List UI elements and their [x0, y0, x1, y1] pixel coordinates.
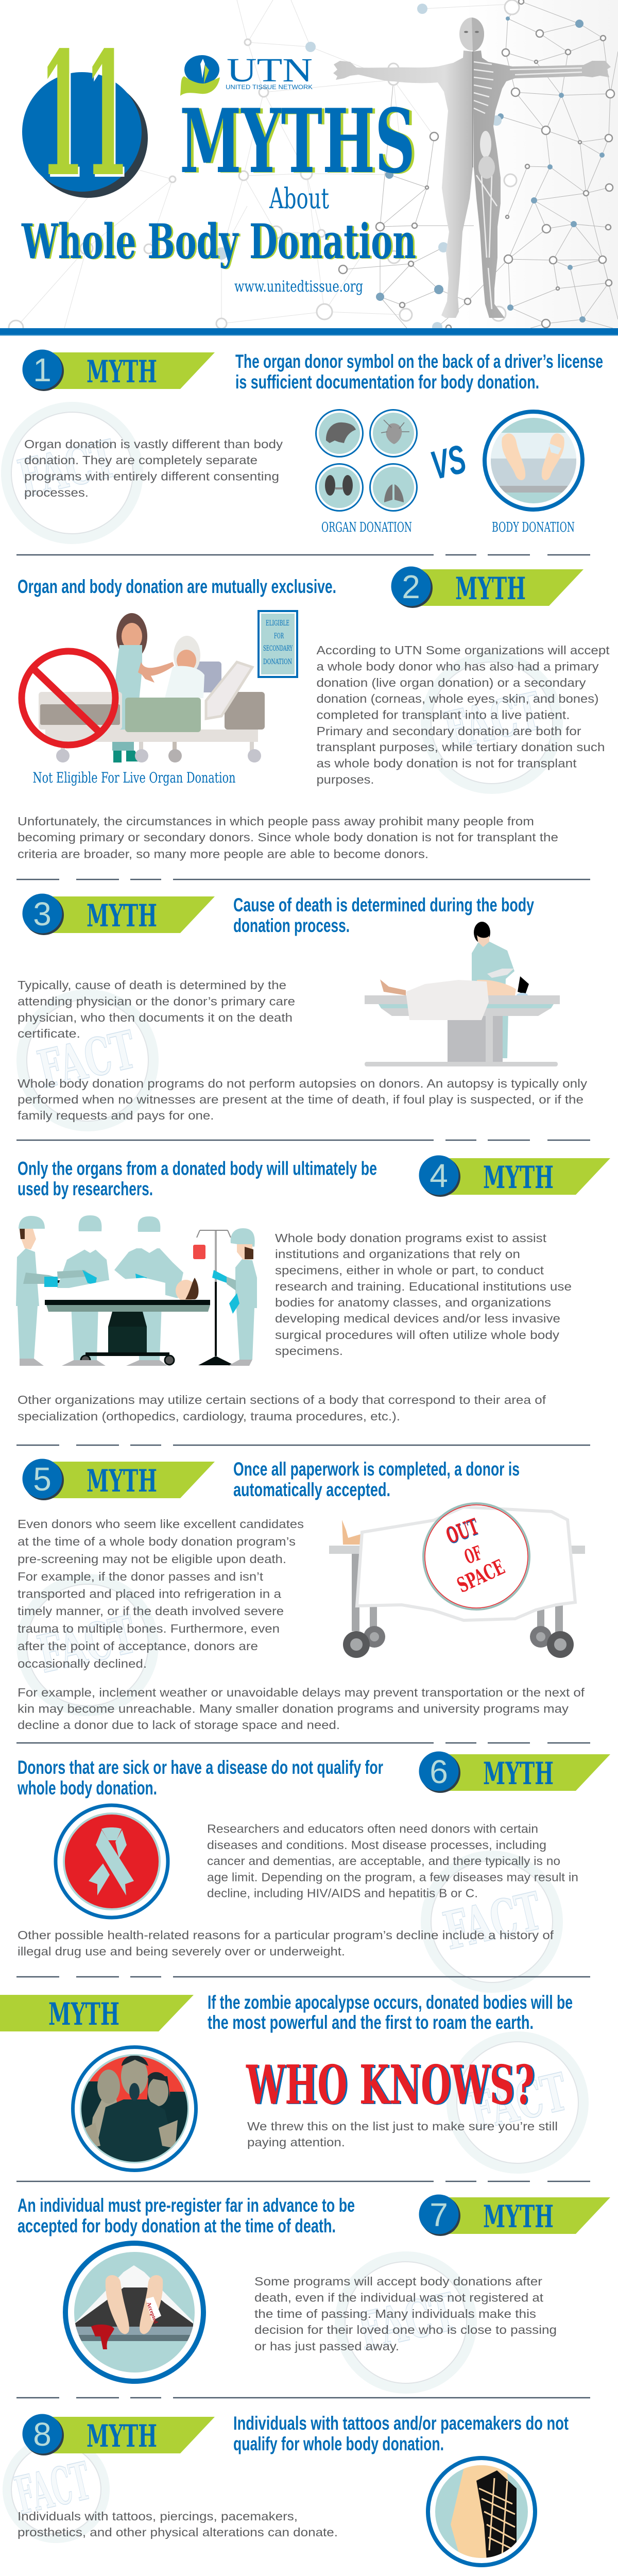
banner: myth 7: MYTH — [483, 2199, 554, 2235]
text: myth 5 fact: transported and placed into refrigeration in a — [18, 1587, 282, 1600]
icon: liver — [316, 410, 363, 456]
heading: myth 6: whole body donation. — [17, 1777, 157, 1799]
text: myth 5 fact: trauma to multiple bones. Furthermore, even — [18, 1622, 280, 1635]
text: myth 4 fact: specimens, either in whole or part, to conduct — [275, 1263, 544, 1277]
heading: zombie myth — [208, 1992, 573, 2033]
text: myth 2 fact: transplant purposes, while tertiary donation such — [316, 740, 605, 754]
caption: not eligible: Not Eligible For Live Organ Donation — [33, 769, 236, 786]
heading: myth 4 — [18, 1158, 377, 1199]
heading: myth 2: Organ and body donation are mutually exclusive. — [18, 576, 336, 597]
banner: myth 2: 2 — [402, 568, 420, 605]
text: myth 5 continued: kin may become unreachable. Many smaller donation programs and university programs may — [18, 1702, 569, 1716]
FACT stamp 6: FACT — [438, 1880, 547, 1961]
banner: myth 5: MYTH — [87, 1463, 157, 1499]
FACT stamp 6 — [426, 1856, 558, 1988]
text: myth 2 fact: as whole body donation is not for transplant — [316, 756, 577, 770]
text: myth 2 fact: a whole body donor who has also had a primary — [316, 659, 599, 673]
illustration: surgical team — [16, 1215, 257, 1366]
FACT stamp 1: FACT — [13, 428, 122, 509]
text: myth 2 fact: According to UTN Some organizations will accept — [316, 643, 610, 657]
website address: www.unitedtissue.org — [234, 278, 363, 296]
text: myth 1 fact: processes. — [24, 486, 89, 499]
banner: myth 1 — [23, 349, 215, 391]
FACT stamp 7: FACT — [353, 2281, 462, 2362]
banner: myth 7: 7 — [430, 2196, 448, 2233]
banner: myth 2: MYTH — [455, 571, 526, 607]
text: myth 6 continued: illegal drug use and being severely over or underweight. — [18, 1944, 345, 1958]
stamp: out of space — [423, 1503, 529, 1609]
text: 11 — [41, 17, 131, 217]
text: myth 5 fact: pre-screening may not be eligible upon death. — [18, 1552, 286, 1566]
banner: myth 6 — [419, 1752, 610, 1793]
text: myth 7 fact — [254, 2275, 557, 2353]
VS label: VS — [426, 436, 470, 488]
banner: zombie myth: MYTH — [48, 1996, 119, 2032]
FACT stamp zombie — [452, 2037, 583, 2168]
logo: United Tissue Network — [180, 52, 313, 96]
banner: myth 1: 1 — [33, 351, 52, 388]
title: MYTHS: MYTHS — [182, 90, 418, 194]
FACT stamp 5: FACT — [32, 1604, 142, 1685]
banner: myth 6: MYTH — [483, 1756, 554, 1792]
title: MYTHS: MYTHS — [180, 90, 415, 193]
title: MYTHS — [180, 90, 418, 194]
text: myth 6 fact — [207, 1822, 578, 1900]
heading: myth 6 — [17, 1757, 383, 1799]
text: myth 2 fact: purposes. — [316, 773, 374, 786]
heading: myth 7: An individual must pre-register far in advance to be — [18, 2195, 355, 2216]
icon: heart — [370, 410, 417, 456]
text: myth 2 continued: criteria are broader, so many more people are able to become donors. — [18, 847, 428, 860]
text: myth 3 fact: Typically, cause of death is determined by the — [18, 978, 286, 992]
title: Whole Body Donation — [21, 213, 418, 270]
text: myth 4 fact — [275, 1231, 572, 1358]
FACT stamp 5 — [22, 1579, 153, 1711]
banner: myth 2 — [391, 567, 583, 608]
text: myth 2 fact: Primary and secondary donation are both for — [316, 724, 581, 738]
text: myth 1 fact: donation. They are completely separate — [24, 453, 258, 467]
banner: myth 6: 6 — [430, 1753, 448, 1790]
heading: myth 8: qualify for whole body donation. — [233, 2433, 444, 2454]
stamp: out of space: OUT — [443, 1514, 482, 1548]
text: zombie fact: paying attention. — [247, 2136, 345, 2149]
text: myth 1 fact: programs with entirely different consenting — [24, 470, 279, 483]
FACT stamp 8 — [7, 2441, 105, 2538]
text: myth 2 continued: becoming primary or secondary donors. Since whole body donation is not for transplant the — [18, 831, 558, 844]
FACT stamp 8: FACT — [10, 2450, 96, 2526]
banner: myth 5: 5 — [33, 1461, 52, 1498]
icon: no symbol over bed — [22, 651, 115, 745]
text: myth 4 fact: developing medical devices and/or less invasive — [275, 1312, 560, 1325]
icon: feet with toe tag: Accepted — [145, 2301, 159, 2325]
heading: myth 4: Only the organs from a donated body will ultimately be — [18, 1158, 377, 1179]
big number 11 badge — [22, 14, 148, 217]
sign: eligible for secondary donation — [259, 611, 297, 677]
text: myth 4 continued: specialization (orthopedics, cardiology, trauma procedures, etc.). — [18, 1410, 400, 1423]
illustration: nurse with patient in bed — [39, 613, 265, 762]
text: myth 6 fact: Researchers and educators often need donors with certain — [207, 1822, 538, 1835]
text: myth 5 fact: For example, if the donor passes and isn’t — [18, 1570, 264, 1583]
banner: myth 8: 8 — [33, 2416, 52, 2453]
text: myth 7 fact: death, even if the individual was not registered at — [254, 2291, 544, 2304]
sign: eligible for secondary donation: FOR — [274, 632, 284, 640]
text: myth 5 fact: Even donors who seem like excellent candidates — [18, 1517, 304, 1531]
banner: myth 3 — [23, 893, 215, 935]
heading: myth 6: Donors that are sick or have a disease do not qualify for — [18, 1757, 383, 1778]
heading: myth 5 — [233, 1459, 520, 1500]
text: myth 3 continued: family requests and pays for one. — [18, 1109, 214, 1122]
heading: myth 5: automatically accepted. — [233, 1479, 390, 1500]
banner: myth 4: MYTH — [483, 1160, 554, 1196]
heading: myth 1 — [235, 351, 603, 393]
heading: myth 8 — [233, 2413, 569, 2454]
text: myth 6 continued: Other possible health-related reasons for a particular program’s decline include a history of — [18, 1928, 554, 1942]
text: myth 7 fact: Some programs will accept body donations after — [254, 2275, 542, 2288]
text: myth 3 fact — [18, 978, 295, 1040]
text: myth 4 fact: bodies for anatomy classes, and organizations — [275, 1296, 551, 1309]
text: myth 5 fact: occasionally declined. — [18, 1657, 147, 1670]
FACT stamp 2 — [426, 657, 558, 789]
heading: myth 3 — [233, 894, 534, 936]
title: Whole Body Donation: Whole Body Donation — [23, 214, 418, 270]
icon: awareness ribbon — [56, 1805, 168, 1918]
logo: United Tissue Network: UNITED TISSUE NETWORK — [226, 84, 313, 91]
banner: zombie myth — [0, 1995, 194, 2032]
text: myth 7 fact: decision for their loved one who is close to passing — [254, 2323, 557, 2336]
text: myth 2 continued: Unfortunately, the circumstances in which people pass away prohibit many people from — [18, 815, 534, 828]
sign: eligible for secondary donation: ELIGIBLE — [266, 619, 289, 628]
text: myth 1 fact — [24, 437, 283, 499]
sign: eligible for secondary donation: SECONDARY — [263, 645, 293, 653]
text: zombie fact: We threw this on the list just to make sure you’re still — [247, 2120, 558, 2133]
heading: myth 7: accepted for body donation at the time of death. — [18, 2215, 336, 2236]
text: myth 5 fact: at the time of a whole body donation program’s — [18, 1535, 296, 1548]
text: myth 1 fact: Organ donation is vastly different than body — [24, 437, 283, 451]
FACT stamp 2: FACT — [438, 681, 547, 761]
text: myth 8 fact: Individuals with tattoos, piercings, pacemakers, — [18, 2510, 298, 2523]
text: myth 5 continued: decline a donor due to lack of storage space and need. — [18, 1718, 340, 1732]
illustration: gurney under sheet — [329, 1507, 585, 1658]
icon: lungs — [370, 464, 417, 511]
banner: myth 8: MYTH — [87, 2418, 157, 2454]
icon: kidneys — [316, 464, 363, 511]
banner: myth 1: MYTH — [87, 354, 157, 390]
title: About: About — [269, 182, 329, 215]
text: myth 6 continued — [18, 1928, 554, 1958]
heading: myth 4: used by researchers. — [18, 1178, 153, 1199]
dividers — [16, 555, 590, 2576]
FACT stamp 7 — [340, 2257, 472, 2388]
text: myth 6 fact: cancer and dementias, are acceptable, and there typically is no — [207, 1854, 560, 1868]
banner: myth 5 — [23, 1459, 215, 1500]
banner: myth 3: 3 — [33, 895, 52, 933]
FACT stamp 1 — [6, 407, 138, 539]
text: myth 4 fact: institutions and organizations that rely on — [275, 1247, 520, 1261]
text: zombie fact — [247, 2120, 558, 2149]
logo: United Tissue Network: UTN — [227, 52, 313, 89]
text: myth 4 continued — [18, 1393, 546, 1423]
header background network — [9, 0, 618, 335]
heading: myth 3: donation process. — [233, 915, 350, 936]
text: myth 7 fact: or has just passed away. — [254, 2340, 399, 2353]
text: myth 5 fact: after the point of acceptance, donors are — [18, 1639, 258, 1653]
sign: eligible for secondary donation: DONATION — [263, 658, 292, 666]
banner: myth 8 — [23, 2414, 215, 2455]
title: Whole Body Donation: Whole Body Donation — [21, 213, 416, 269]
heading: myth 7 — [18, 2195, 355, 2236]
text: myth 8 fact: prosthetics, and other physical alterations can donate. — [18, 2526, 338, 2539]
banner: myth 4 — [419, 1155, 610, 1197]
label: organ donation: ORGAN DONATION — [321, 520, 412, 535]
illustration: doctor examining body on table — [365, 922, 560, 1066]
text: myth 8 fact — [18, 2510, 338, 2539]
text: myth 4 fact: Whole body donation programs exist to assist — [275, 1231, 547, 1245]
text: myth 4 fact: specimens. — [275, 1344, 343, 1358]
banner: myth 7 — [419, 2195, 610, 2236]
icon: zombies — [73, 2047, 196, 2170]
text: myth 4 fact: surgical procedures will often utilize whole body — [275, 1328, 559, 1342]
banner: myth 3: MYTH — [87, 898, 157, 934]
text: myth 5 fact: timely manner, or if the death involved severe — [18, 1604, 284, 1618]
text: myth 5 continued — [18, 1686, 585, 1732]
text: myth 3 continued: performed when no witnesses are present at the time of death, if foul play is suspected, or if the — [18, 1093, 583, 1106]
text: myth 7 fact: the time of passing. Many individuals make this — [254, 2307, 536, 2320]
icon: body donation feet — [485, 412, 582, 510]
text: myth 2 fact: donation (live organ donation) or a secondary — [316, 676, 586, 689]
illustration: human anatomy figure — [333, 18, 611, 318]
text: myth 3 continued: Whole body donation programs do not perform autopsies on donors. An autopsy is typically only — [18, 1077, 587, 1090]
icon: tattooed arm — [428, 2458, 535, 2565]
stamp: out of space: OUT — [443, 1515, 483, 1549]
text: myth 6 fact: age limit. Depending on the program, a few diseases may result in — [207, 1870, 578, 1884]
text: myth 2 continued — [18, 815, 558, 860]
banner: myth 4: 4 — [430, 1157, 448, 1194]
text: myth 4 continued: Other organizations may utilize certain sections of a body that correspond to their area of — [18, 1393, 546, 1406]
icon: feet with toe tag — [65, 2243, 203, 2381]
header blue bar — [0, 328, 618, 336]
text: myth 3 fact: certificate. — [18, 1027, 80, 1040]
text: myth 3 fact: physician, who then documents it on the death — [18, 1011, 293, 1024]
FACT stamp 3: FACT — [32, 1019, 142, 1100]
text: myth 5 fact — [18, 1517, 304, 1670]
text: myth 2 fact — [316, 643, 610, 786]
label: body donation: BODY DONATION — [492, 520, 575, 535]
stamp: out of space: OF — [461, 1541, 485, 1568]
text: myth 2 fact: donation (corneas, whole eyes, skin, and bones) — [316, 692, 598, 705]
text: myth 3 continued — [18, 1077, 587, 1122]
text: 11 — [40, 14, 129, 214]
text: myth 4 fact: research and training. Educational institutions use — [275, 1280, 572, 1293]
text: myth 2 fact: completed for transplant into a live patient. — [316, 708, 570, 721]
text: myth 6 fact: decline, including HIV/AIDS and hepatitis B or C. — [207, 1887, 478, 1900]
text: myth 3 fact: attending physician or the donor’s primary care — [18, 994, 295, 1008]
text: myth 5 continued: For example, inclement weather or unavoidable delays may prevent transportation or the next of — [18, 1686, 585, 1699]
text: myth 6 fact: diseases and conditions. Most disease processes, including — [207, 1838, 546, 1852]
stamp: out of space: SPACE — [453, 1555, 508, 1598]
FACT stamp 3 — [22, 994, 153, 1126]
